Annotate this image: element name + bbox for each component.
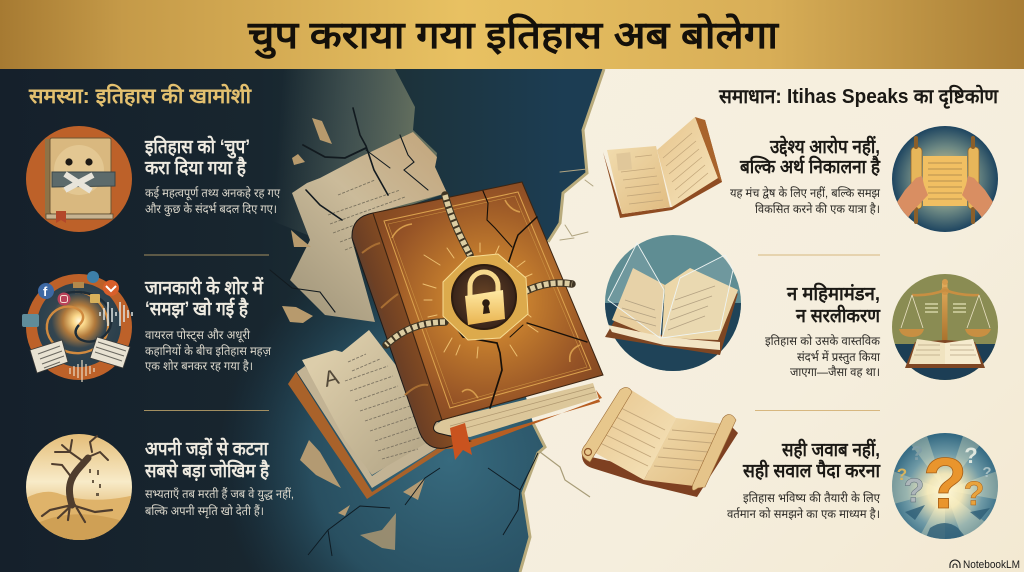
icon: information noise swirl <box>22 271 132 382</box>
torn manuscript pages and wall cracks <box>270 108 593 323</box>
text: right questions: इतिहास भविष्य की तैयारी के लिए <box>743 491 880 505</box>
padlock plate <box>443 254 528 340</box>
icon: question marks burst: ? <box>964 443 978 468</box>
text: no glorification: जाएगा—जैसा वह था। <box>790 365 880 379</box>
book spine <box>352 213 470 448</box>
icon: question marks burst: ? <box>982 464 992 481</box>
text: silenced history: कई महत्वपूर्ण तथ्य अनकहे रह गए <box>145 186 280 201</box>
text: silenced history: करा दिया गया है <box>144 156 247 179</box>
section heading: problem: समस्या: इतिहास की खामोशी <box>28 83 253 108</box>
icon: uprooted tree in desert <box>26 434 135 545</box>
title banner <box>0 0 1024 69</box>
text: meaning lost in noise: जानकारी के शोर में <box>144 276 264 299</box>
text: purpose is meaning: यह मंच द्वेष के लिए नहीं, बल्कि समझ <box>730 186 881 200</box>
text: meaning lost in noise: एक शोर बनकर रह गया है। <box>145 359 253 373</box>
cracks on cover <box>453 191 587 408</box>
icon: question marks burst: ? <box>897 465 907 484</box>
text: no glorification: संदर्भ में प्रस्तुत किया <box>797 350 881 365</box>
text: right questions: सही सवाल पैदा करना <box>742 459 881 482</box>
book cover <box>373 182 603 420</box>
text: purpose is meaning: बल्कि अर्थ निकालना है <box>739 155 881 178</box>
padlock <box>470 272 498 296</box>
icon: question marks burst: ? <box>923 444 967 524</box>
text: silenced history <box>144 135 280 217</box>
chains <box>386 195 572 345</box>
book pages <box>427 383 598 437</box>
icon: scales of justice over book <box>892 274 998 380</box>
text: meaning lost in noise <box>144 276 272 373</box>
text: no glorification: न महिमामंडन, <box>786 282 880 305</box>
background: cream right side <box>500 69 1024 572</box>
ribbon <box>450 423 472 460</box>
illustration: open scroll book <box>582 387 738 497</box>
text: meaning lost in noise: कहानियों के बीच इतिहास महज़ <box>145 344 272 358</box>
icon: question marks burst: ? <box>911 443 923 465</box>
text: no glorification: न सरलीकरण <box>795 304 881 327</box>
text: no glorification <box>765 282 881 379</box>
open page book under central book: A <box>321 364 342 392</box>
illustration: open book <box>603 117 722 218</box>
text: right questions: वर्तमान को समझने का एक माध्यम है। <box>727 507 880 521</box>
text: purpose is meaning <box>730 135 881 216</box>
text: silenced history: इतिहास को ‘चुप’ <box>144 135 250 159</box>
text: right questions: सही जवाब नहीं, <box>781 438 880 461</box>
icon: question marks burst: ? <box>964 475 984 513</box>
text: purpose is meaning: उद्देश्य आरोप नहीं, <box>769 135 880 158</box>
text: cut from roots: सबसे बड़ा जोखिम है <box>144 459 270 482</box>
text: silenced history: और कुछ के संदर्भ बदल दिए गए। <box>145 202 277 217</box>
text: cut from roots: बल्कि अपनी स्मृति खो देती हैं। <box>145 504 264 519</box>
text: cut from roots: सभ्यताएँ तब मरती हैं जब वे युद्ध नहीं, <box>145 487 294 502</box>
text: right questions <box>727 438 881 521</box>
icon: information noise swirl: f <box>43 284 48 299</box>
central chained leather book <box>352 182 603 460</box>
title text: चुप कराया गया इतिहास अब बोलेगा <box>247 13 779 59</box>
text: meaning lost in noise: ‘समझ’ खो गई है <box>145 297 249 320</box>
icon: question marks burst <box>892 433 998 539</box>
icon: glowing scroll held by hands <box>892 126 998 232</box>
text: cut from roots <box>144 437 294 519</box>
section heading: solution: समाधान: Itihas Speaks का दृष्टिकोण <box>718 84 999 109</box>
icon: question marks burst: ? <box>904 472 924 510</box>
glow rays <box>423 243 538 358</box>
illustration: book with transparent pages in circle <box>605 235 741 371</box>
text: cut from roots: अपनी जड़ों से कटना <box>145 437 269 460</box>
text: no glorification: इतिहास को उसके वास्तविक <box>765 334 881 348</box>
icon: gagged book <box>26 126 132 232</box>
text: meaning lost in noise: वायरल पोस्ट्स और अधूरी <box>145 328 251 343</box>
text: purpose is meaning: विकसित करने की एक यात्रा है। <box>755 202 880 216</box>
open page book under central book <box>288 330 590 556</box>
NotebookLM watermark: NotebookLM <box>963 559 1020 571</box>
